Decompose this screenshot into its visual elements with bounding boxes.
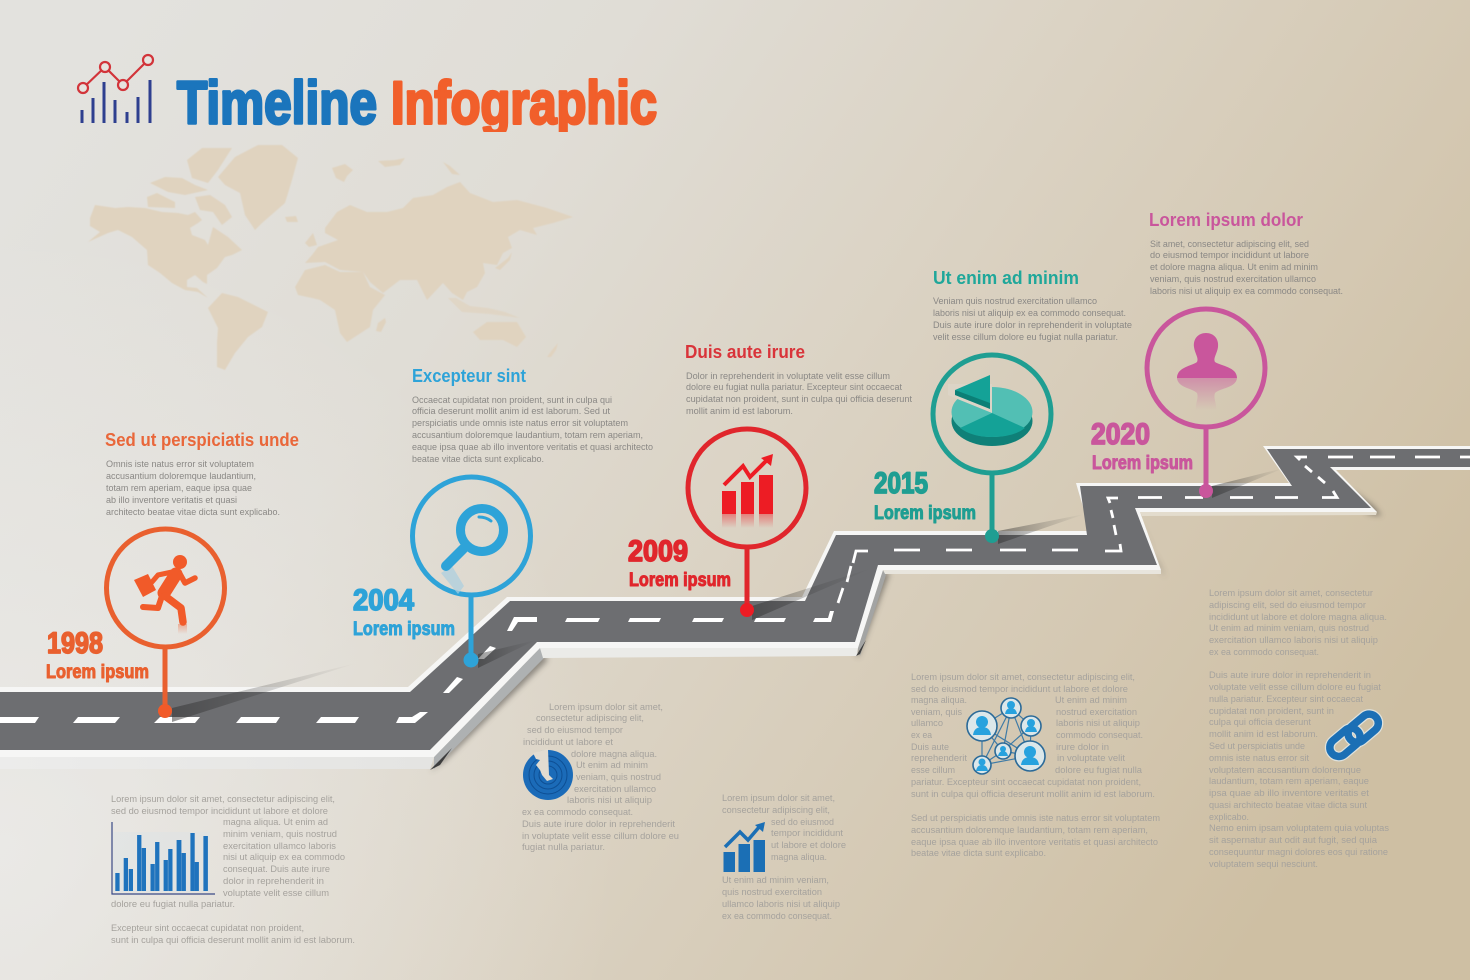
paragraph [111,793,355,945]
paragraph: Lorem ipsum dolor sit amet, consectetur [1209,587,1373,598]
pin marker 2020 [1147,309,1265,498]
paragraph: omnis iste natus error sit [1209,752,1309,763]
body: do eiusmod tempor incididunt ut labore [1150,249,1309,260]
bar chart [112,822,215,894]
panel: network text [911,671,1160,858]
paragraph: dolor in reprehenderit in [223,875,324,886]
pin: 2015 [874,355,1051,543]
paragraph: Ut enim ad minim [576,759,648,770]
road fold shadows [430,490,1382,772]
heading: Sed ut perspiciatis unde [105,430,299,450]
body: ab illo inventore veritatis et quasi [106,494,237,505]
paragraph: Lorem ipsum dolor sit amet, consectetur adipiscing elit, [111,793,335,804]
paragraph: dolore eu fugiat nulla [1055,764,1143,775]
body: officia deserunt mollit anim id est laborum. Sed ut [412,405,610,416]
paragraph: irure dolor in [1056,741,1109,752]
pin: 2004 [353,477,530,668]
body: cupidatat non proident, sunt in culpa qui officia deserunt [686,393,912,404]
paragraph: voluptate velit esse cillum dolore eu fugiat [1209,681,1381,692]
paragraph: Ut enim ad minim veniam, quis nostrud [1209,622,1369,633]
paragraph: consectetur adipiscing elit, [722,804,830,815]
icon: running man [134,555,195,634]
pin marker 2009 [688,429,806,617]
body: mollit anim id est laborum. [686,405,793,416]
paragraph: Ut enim ad minim veniam, [722,874,829,885]
body [412,394,653,464]
year 2020: 2020 [1091,418,1150,451]
paragraph: Duis aute irure dolor in reprehenderit in [1209,669,1371,680]
paragraph: Sed ut perspiciatis unde omnis iste natus error sit voluptatem [911,812,1160,823]
paragraph: cupidatat non proident, sunt in [1209,705,1334,716]
paragraph: consequat. Duis aute irure [223,863,330,874]
paragraph: beatae vitae dicta sunt explicabo. [911,847,1046,858]
paragraph: Sed ut perspiciatis unde [1209,740,1305,751]
road [0,446,1470,772]
paragraph: quis nostrud exercitation [722,886,822,897]
paragraph: Duis aute [911,741,949,752]
label 1998: Lorem ipsum [46,662,149,683]
paragraph: incididunt ut labore et dolore magna aliqua. [1209,611,1387,622]
panel: bar chart text [111,793,355,945]
paragraph: commodo consequat. [1056,729,1143,740]
paragraph: veniam, quis [911,706,962,717]
panel: radial chart text [522,701,679,852]
paragraph: magna aliqua. [771,851,827,862]
paragraph: ex ea [911,729,933,740]
pin: 2020 [1091,309,1265,498]
heading: Excepteur sint [412,366,526,386]
panel: growth icon text [722,792,846,921]
icon: radial chart [523,749,573,800]
paragraph: Duis aute irure dolor in reprehenderit [522,818,675,829]
body: beatae vitae dicta sunt explicabo. [412,453,544,464]
road asphalt [0,449,1470,750]
paragraph: eaque ipsa quae ab illo inventore veritatis et quasi architecto [911,836,1158,847]
body [933,295,1132,342]
body: perspiciatis unde omnis iste natus error sit voluptatem [412,417,628,428]
paragraph: ex ea commodo consequat. [522,806,633,817]
paragraph: sed do eiusmod [771,816,834,827]
paragraph: quasi architecto beatae vitae dicta sunt [1209,799,1367,810]
heading: Lorem ipsum dolor [1149,210,1303,230]
paragraph: incididunt ut labore et [523,736,613,747]
body: veniam, quis nostrud exercitation ullamco [1150,273,1316,284]
pin marker 2015 [933,355,1051,543]
paragraph: nisi ut aliquip ex ea commodo [223,851,345,862]
paragraph: ex ea commodo consequat. [722,910,832,921]
icon: chain link [1326,710,1382,761]
label 2009: Lorem ipsum [629,570,731,591]
paragraph [911,671,1160,858]
paragraph: nostrud exercitation [1056,706,1137,717]
paragraph: in voluptate velit [1057,752,1125,763]
paragraph: Ut enim ad minim [1055,694,1127,705]
paragraph: pariatur. Excepteur sint occaecat cupidatat non proident, [911,776,1141,787]
paragraph: voluptatem sequi nesciunt. [1209,858,1318,869]
pin: 2009 [628,429,806,617]
year 1998: 1998 [47,627,103,660]
body: Veniam quis nostrud exercitation ullamco [933,295,1097,306]
paragraph: Lorem ipsum dolor sit amet, [722,792,835,803]
title [176,78,657,132]
paragraph [522,701,679,852]
body [1150,238,1343,296]
body: velit esse cillum dolore eu fugiat nulla pariatur. [933,331,1118,342]
body: accusantium doloremque laudantium, totam rem aperiam, [412,429,643,440]
label 2004: Lorem ipsum [353,619,455,640]
paragraph: dolore magna aliqua. [571,748,657,759]
body [106,458,280,517]
body: Sit amet, consectetur adipiscing elit, sed [1150,238,1309,249]
icon: people network [967,698,1045,774]
text block: Sed ut perspiciatis unde [105,430,299,517]
paragraph: sed do eiusmod tempor [527,724,623,735]
paragraph: ex ea commodo consequat. [1209,646,1319,657]
road pin shadows [172,468,1284,722]
paragraph: voluptate velit esse cillum [223,887,329,898]
title: Timeline [177,70,377,136]
body: dolore eu fugiat nulla pariatur. Excepteur sint occaecat [686,381,902,392]
paragraph: veniam, quis nostrud [576,771,661,782]
paragraph: exercitation ullamco laboris [223,840,336,851]
body: laboris nisi ut aliquip ex ea commodo consequat. [933,307,1126,318]
paragraph: ipsa quae ab illo inventore veritatis et [1209,787,1369,798]
body: eaque ipsa quae ab illo inventore veritatis et quasi architecto [412,441,653,452]
paragraph: voluptatem accusantium doloremque [1209,764,1361,775]
body: laboris nisi ut aliquip ex ea commodo consequat. [1150,285,1343,296]
paragraph: consequuntur magni dolores eos qui ratione [1209,846,1388,857]
paragraph: explicabo. [1209,811,1249,822]
icon: rising bars [722,454,773,528]
title icon: line and bars [78,55,153,123]
paragraph: Lorem ipsum dolor sit amet, [549,701,663,712]
text block: Lorem ipsum dolor [1149,210,1343,296]
paragraph: exercitation ullamco [574,783,656,794]
paragraph: sed do eiusmod tempor incididunt ut labore et dolore [911,683,1128,694]
paragraph: consectetur adipiscing elit, [536,712,644,723]
label 2020: Lorem ipsum [1092,453,1193,474]
year 2015: 2015 [874,467,928,500]
pin marker 2004 [412,477,530,668]
text block: Duis aute irure [685,342,912,416]
road centre dashes [0,611,834,723]
icon: magnifier [441,508,504,594]
body: architecto beatae vitae dicta sunt explicabo. [106,506,280,517]
body: accusantium doloremque laudantium, [106,470,256,481]
paragraph: magna aliqua. Ut enim ad [223,816,328,827]
paragraph: magna aliqua. [911,694,967,705]
icon: person bust [1177,333,1237,410]
paragraph: sunt in culpa qui officia deserunt mollit anim id est laborum. [111,934,355,945]
body: Omnis iste natus error sit voluptatem [106,458,254,469]
paragraph: laudantium, totam rem aperiam, eaque [1209,775,1369,786]
icon: pie chart [948,375,1032,446]
panel: chain text [1209,587,1389,869]
year 2004: 2004 [353,584,414,617]
paragraph: ullamco [911,717,943,728]
paragraph: Lorem ipsum dolor sit amet, consectetur adipiscing elit, [911,671,1135,682]
body: totam rem aperiam, eaque ipsa quae [106,482,252,493]
heading: Ut enim ad minim [933,268,1079,288]
paragraph: laboris nisi ut aliquip [1056,717,1140,728]
paragraph: laboris nisi ut aliquip [567,794,652,805]
body: Dolor in reprehenderit in voluptate velit esse cillum [686,370,890,381]
text block: Ut enim ad minim [933,268,1132,342]
body: et dolore magna aliqua. Ut enim ad minim [1150,261,1318,272]
paragraph: in voluptate velit esse cillum dolore eu [522,830,679,841]
icon: growth bars [724,822,765,872]
text block: Excepteur sint [412,366,653,464]
paragraph: reprehenderit [911,752,967,763]
paragraph: tempor incididunt [771,827,843,838]
paragraph: sunt in culpa qui officia deserunt mollit anim id est laborum. [911,788,1155,799]
paragraph: nulla pariatur. Excepteur sint occaecat [1209,693,1363,704]
paragraph: ut labore et dolore [771,839,846,850]
paragraph: sit aspernatur aut odit aut fugit, sed quia [1209,834,1378,845]
body: Duis aute irure dolor in reprehenderit in voluptate [933,319,1132,330]
road side faces [0,512,1377,770]
year 2009: 2009 [628,535,688,568]
paragraph: fugiat nulla pariatur. [522,841,605,852]
pin: 1998 [46,529,224,718]
paragraph: Nemo enim ipsam voluptatem quia voluptas [1209,822,1389,833]
paragraph: ullamco laboris nisi ut aliquip [722,898,840,909]
paragraph: mollit anim id est laborum. [1209,728,1318,739]
label 2015: Lorem ipsum [874,503,976,524]
paragraph: accusantium doloremque laudantium, totam rem aperiam, [911,824,1148,835]
paragraph: sed do eiusmod tempor incididunt ut labore et dolore [111,805,328,816]
paragraph: Excepteur sint occaecat cupidatat non proident, [111,922,304,933]
road white edge [0,446,1470,757]
paragraph: minim veniam, quis nostrud [223,828,337,839]
title: Infographic [391,70,657,136]
paragraph: exercitation ullamco laboris nisi ut aliquip [1209,634,1378,645]
body: Occaecat cupidatat non proident, sunt in culpa qui [412,394,612,405]
body [686,370,912,416]
paragraph [1209,587,1389,869]
paragraph: adipiscing elit, sed do eiusmod tempor [1209,599,1366,610]
paragraph [722,792,846,921]
pin marker 1998 [106,529,224,718]
heading: Duis aute irure [685,342,805,362]
paragraph: dolore eu fugiat nulla pariatur. [111,898,235,909]
paragraph: culpa qui officia deserunt [1209,716,1311,727]
world map [88,145,573,370]
paragraph: esse cillum [911,764,955,775]
